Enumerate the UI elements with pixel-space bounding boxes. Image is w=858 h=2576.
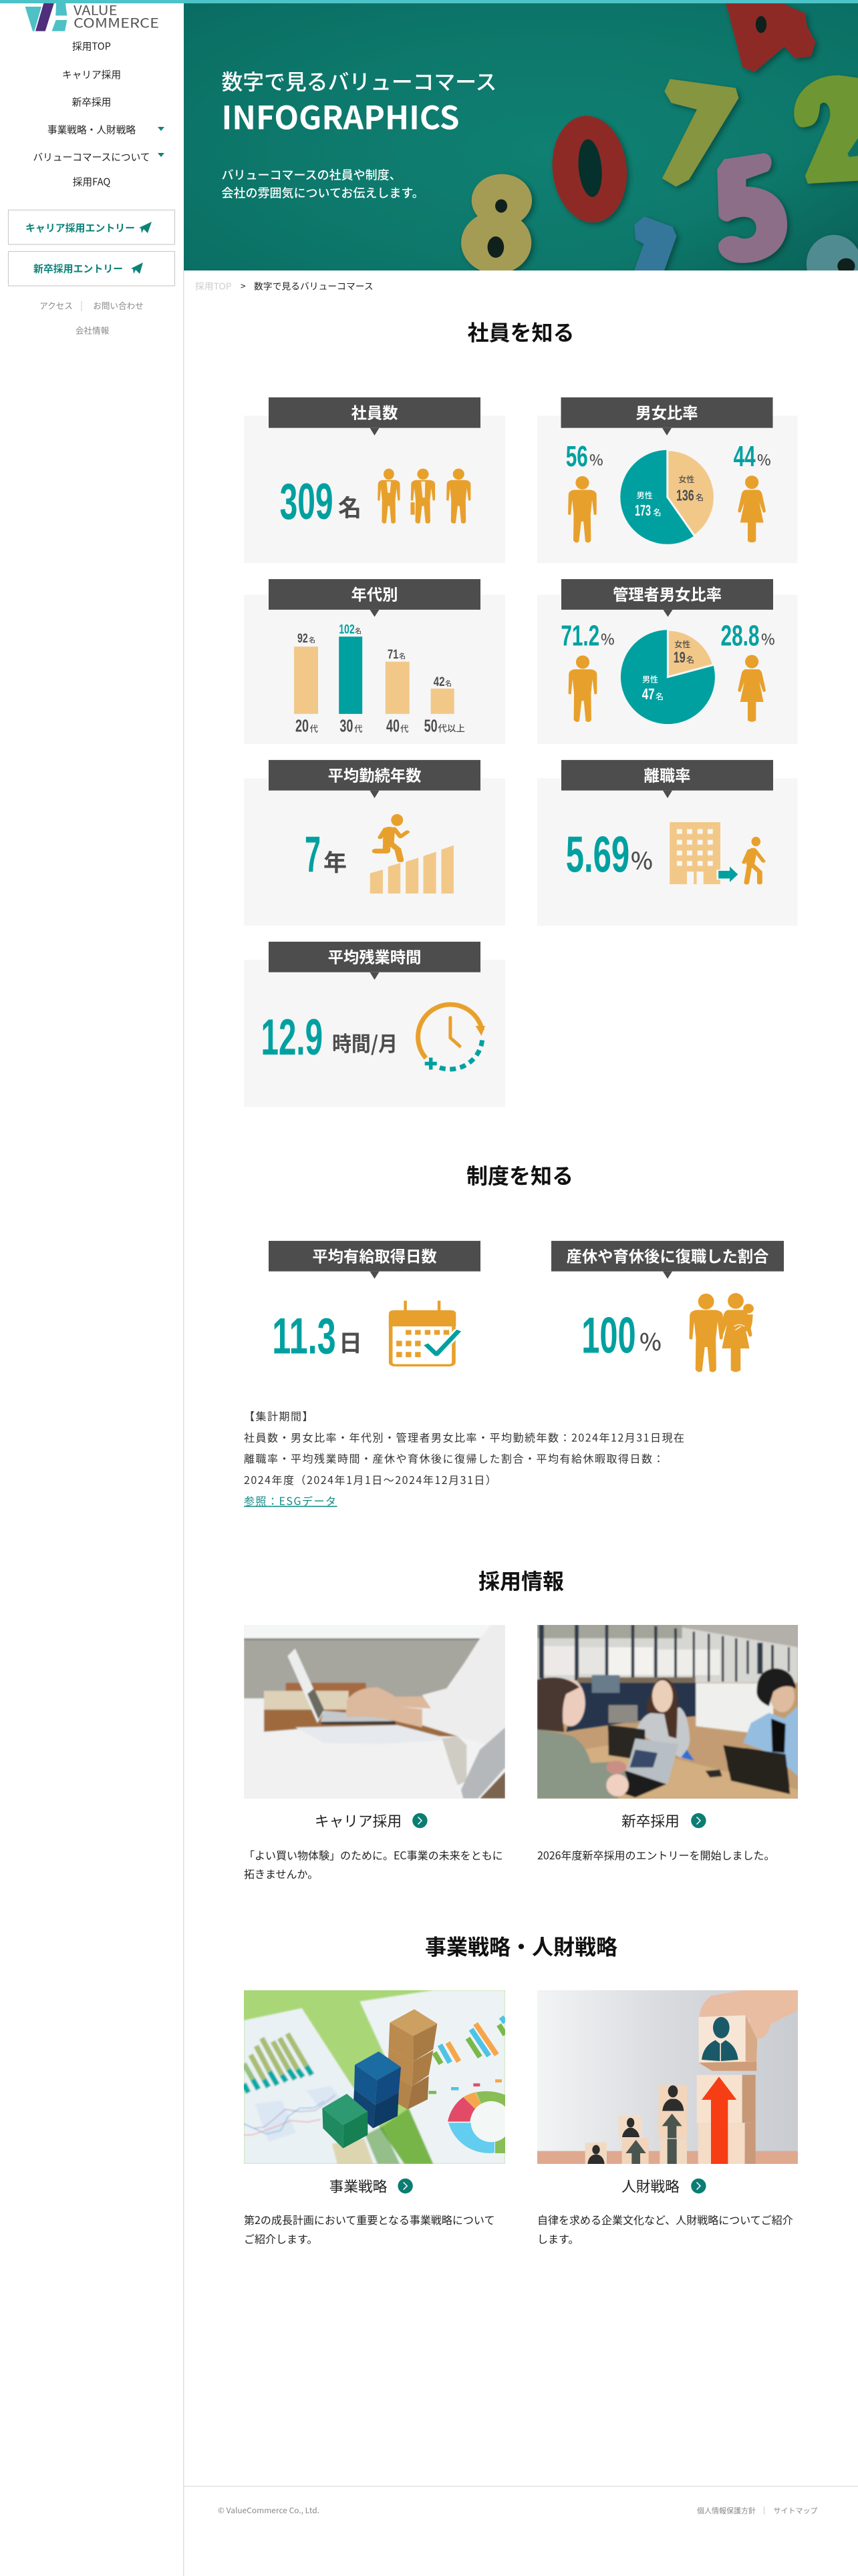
panel title: 平均残業時間 (328, 944, 421, 967)
panel title (269, 1241, 480, 1279)
pie chart: 136 (676, 487, 694, 504)
breadcrumb: 採用TOP (195, 279, 232, 292)
heading: systems: 制度を知る (466, 1159, 573, 1190)
panel title (269, 579, 480, 617)
pie chart: 女性 (678, 474, 694, 485)
panel title: 社員数 (351, 400, 398, 423)
card: talent strategy (537, 1990, 798, 2247)
pie chart (620, 450, 714, 544)
navigation (33, 39, 164, 189)
figure: 12.9 hours per month: 時間/月 (332, 1027, 398, 1057)
breadcrumb (195, 279, 374, 292)
description: 2026年度新卒採用のエントリーを開始しました。 (537, 1847, 775, 1863)
description (244, 1847, 503, 1881)
hero subtitle: 会社の雰囲気についてお伝えします。 (222, 184, 424, 202)
bar chart: 40 (386, 716, 400, 736)
footer (184, 2486, 858, 2516)
hero heading (222, 65, 496, 138)
footer links: サイトマップ (774, 2505, 818, 2516)
icon: woman (738, 655, 766, 722)
description: 自律を求める企業文化など、人財戦略についてご紹介 (537, 2211, 793, 2227)
figure: 5.69%: 5.69 (566, 827, 629, 884)
description: ご紹介します。 (244, 2231, 317, 2247)
panel title (551, 1241, 784, 1279)
note: aggregation period: 2024年度（2024年1月1日～2024年12月31日） (244, 1471, 497, 1487)
bar chart: 50 (424, 716, 438, 736)
figure: 100%: % (639, 1324, 662, 1358)
description: 「よい買い物体験」のために。EC事業の未来をともに (244, 1847, 503, 1863)
heading: employees: 社員を知る (467, 317, 575, 347)
male percentage: 56 (566, 440, 588, 473)
description (537, 2211, 793, 2247)
figure: 7 years (305, 827, 347, 884)
bar chart: 71 (388, 648, 399, 662)
female percentage: % (761, 628, 775, 649)
panel: manager gender ratio (537, 579, 798, 744)
sidebar sub links: お問い合わせ (93, 299, 144, 311)
pie chart: 47 (642, 685, 655, 703)
footer links: 個人情報保護方針 (697, 2505, 756, 2516)
figure: 11.3 days: 日 (339, 1325, 362, 1359)
charts on right (434, 2017, 505, 2064)
link title: 人財戦略 (621, 2176, 680, 2197)
figure: 309: 名 (338, 490, 362, 524)
pie chart: 19 (674, 649, 686, 666)
panel: average tenure (244, 760, 505, 926)
hero heading: 数字で見るバリューコマース (222, 65, 496, 96)
button: graduate entry: 新卒採用エントリー (33, 261, 123, 275)
navigation: 採用TOP (72, 39, 111, 53)
bar chart: 42 (434, 675, 445, 689)
icon: clock (418, 1004, 485, 1070)
logo text: COMMERCE (74, 13, 159, 32)
icon: rising steps and runner (370, 814, 454, 894)
bar chart: 名 (309, 634, 315, 645)
figure: 7 years: 7 (305, 827, 321, 884)
figure: 7 years: 年 (323, 844, 347, 878)
breadcrumb: 数字で見るバリューコマース (254, 279, 374, 292)
panel title (561, 397, 772, 435)
hero subtitle: バリューコマースの社員や制度、 (222, 166, 402, 184)
icon: man (569, 655, 597, 722)
pie chart: 女性 (674, 638, 690, 650)
navigation: 新卒採用 (72, 95, 111, 109)
sidebar (8, 0, 184, 2576)
panel title: 年代別 (351, 582, 398, 604)
donut chart (448, 2097, 476, 2122)
panel: gender ratio (537, 397, 798, 563)
bar chart: 名 (445, 678, 452, 688)
panel title (269, 942, 480, 980)
panel title (269, 760, 480, 798)
photo: stacked blocks with arrows (537, 1990, 798, 2164)
sidebar divider (183, 270, 184, 2576)
pie chart: 名 (696, 492, 704, 503)
bar chart: 代 (400, 722, 409, 735)
bar chart (294, 623, 465, 736)
sidebar sub links: アクセス (39, 299, 73, 311)
link title (621, 1811, 706, 1831)
bar chart: 代 (310, 722, 318, 735)
card: business strategy (244, 1990, 512, 2247)
panel: by age (244, 579, 505, 744)
note: aggregation period: 【集計期間】 (244, 1408, 314, 1424)
panel: paid leave (269, 1241, 480, 1365)
female percentage: % (757, 449, 771, 470)
description: 第2の成長計画において重要となる事業戦略について (244, 2211, 494, 2227)
bar chart: 代以上 (438, 721, 465, 735)
footer links (697, 2505, 818, 2516)
icon: calendar with check (389, 1300, 459, 1365)
photo: charts and blocks (244, 1990, 505, 2164)
panel title: 男女比率 (635, 400, 698, 423)
figure: 5.69%: % (631, 842, 653, 876)
figure: 11.3 days: 11.3 (272, 1308, 336, 1364)
hero photo of wooden numbers (461, 3, 858, 270)
description: します。 (537, 2231, 579, 2247)
panel title: 管理者男女比率 (613, 582, 722, 604)
note: aggregation period: 離職率・平均残業時間・産休や育休後に復帰した割合・平均有給休暇取得日数： (244, 1450, 665, 1466)
icon: three employees (378, 469, 470, 524)
sidebar sub links: 会社情報 (76, 323, 110, 337)
bar chart: 名 (399, 651, 406, 661)
button: graduate entry (8, 251, 175, 286)
logo mark (25, 3, 67, 31)
icon: man (568, 476, 597, 542)
icon: woman (738, 476, 766, 542)
panel title: 平均有給取得日数 (312, 1244, 437, 1266)
sidebar sub links (39, 299, 144, 337)
panel title: 平均勤続年数 (328, 763, 421, 785)
pie chart: 名 (656, 691, 664, 702)
breadcrumb: > (241, 279, 246, 292)
link title (329, 2176, 413, 2197)
link title: キャリア採用 (315, 1811, 402, 1831)
top accent bar (0, 0, 858, 3)
link title: 新卒採用 (621, 1811, 680, 1831)
icon: family (689, 1293, 754, 1372)
navigation: キャリア採用 (62, 67, 121, 81)
hero banner (184, 3, 858, 293)
card: graduate recruiting (537, 1625, 798, 1863)
panel title: 産休や育休後に復職した割合 (567, 1244, 768, 1266)
panel title: 離職率 (644, 763, 690, 785)
link title (621, 2176, 706, 2197)
bar chart: 名 (355, 626, 362, 636)
pie chart: 名 (686, 654, 694, 665)
copyright: © ValueCommerce Co., Ltd. (218, 2505, 319, 2516)
note: aggregation period: 社員数・男女比率・年代別・管理者男女比率・平均勤続年数：2024年12月31日現在 (244, 1429, 686, 1445)
navigation: 事業戦略・人財戦略 (47, 123, 136, 137)
note: aggregation period (244, 1408, 686, 1509)
female percentage: 44 (734, 440, 756, 473)
male percentage: % (601, 628, 615, 649)
button: career entry (8, 210, 175, 244)
bar chart: 代 (354, 722, 363, 735)
panel: headcount (244, 397, 505, 563)
card: career recruiting (244, 1625, 505, 1881)
bar chart: 102 (339, 623, 355, 637)
heading: recruiting: 採用情報 (478, 1565, 564, 1596)
female percentage: 28.8 (720, 619, 759, 652)
logo text (74, 0, 159, 32)
pie chart: 名 (654, 506, 662, 518)
panel: turnover rate (537, 760, 798, 926)
male percentage: % (589, 449, 603, 470)
heading: strategy: 事業戦略・人財戦略 (425, 1930, 617, 1961)
photo: hands on laptop (244, 1625, 505, 1799)
panel title (269, 397, 480, 435)
navigation: バリューコマースについて (33, 150, 150, 164)
hero subtitle (222, 166, 424, 202)
pie chart: 男性 (637, 490, 653, 501)
note: aggregation period: 参照：ESGデータ (244, 1493, 337, 1509)
link title: 事業戦略 (329, 2176, 388, 2197)
bar chart: 30 (339, 716, 353, 736)
bar chart: 20 (295, 716, 309, 736)
pie chart (621, 630, 715, 724)
button: career entry: キャリア採用エントリー (25, 220, 135, 234)
description: 拓きませんか。 (244, 1865, 318, 1881)
hero background (184, 3, 858, 270)
icon: leaving the building (670, 822, 764, 884)
figure: 12.9 hours per month: 12.9 (261, 1009, 323, 1066)
photo: team meeting in office (537, 1625, 798, 1799)
pie chart: 173 (635, 502, 651, 519)
blocks (390, 2009, 437, 2036)
panel: return rate after leave (551, 1241, 784, 1372)
figure: 309: 309 (280, 474, 333, 530)
panel title (561, 579, 773, 617)
hero heading: INFOGRAPHICS (222, 91, 460, 138)
bar chart: 92 (297, 632, 308, 646)
description (244, 2211, 494, 2247)
logo text: VALUE (74, 0, 118, 19)
panel: average overtime (244, 942, 505, 1107)
logo (25, 0, 159, 32)
panel title (561, 760, 773, 798)
male percentage: 71.2 (561, 619, 599, 652)
navigation: 採用FAQ (73, 175, 110, 189)
figure: 100%: 100 (581, 1307, 636, 1364)
pie chart: 男性 (642, 673, 658, 685)
